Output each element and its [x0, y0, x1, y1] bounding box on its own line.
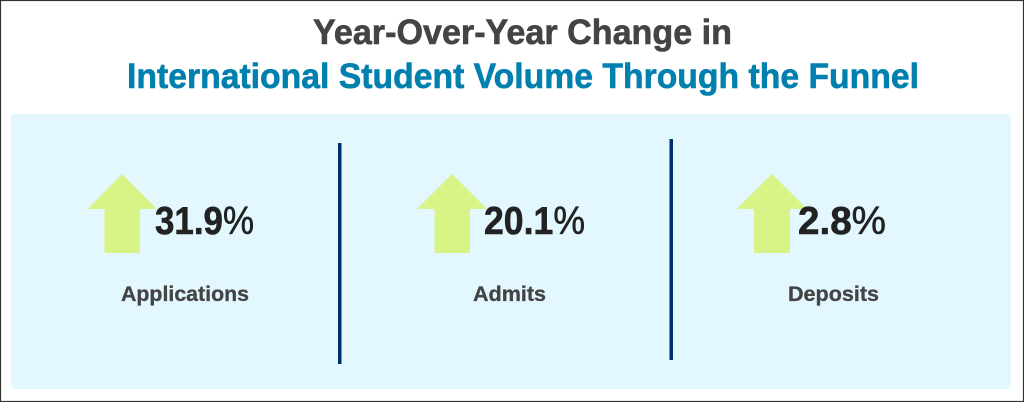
metric: admits [417, 174, 585, 306]
panel: metrics [11, 114, 1011, 389]
label: Applications [121, 283, 249, 306]
value: 31.9% [155, 200, 254, 243]
icon: up arrow [736, 174, 807, 253]
metric: applications [88, 174, 254, 306]
title [127, 13, 919, 96]
label: Admits [473, 283, 546, 306]
value: 20.1% [484, 200, 585, 243]
panel background [11, 114, 1011, 389]
divider 1 [338, 143, 342, 364]
label: Deposits [788, 283, 879, 306]
title line 2: International Student Volume Through the Funnel [127, 57, 919, 96]
icon: up arrow [417, 174, 487, 253]
metric: deposits [736, 174, 886, 306]
title line 1: Year-Over-Year Change in [313, 13, 732, 52]
divider 2 [670, 139, 673, 360]
value: 2.8% [798, 200, 886, 243]
icon: up arrow [88, 174, 157, 253]
